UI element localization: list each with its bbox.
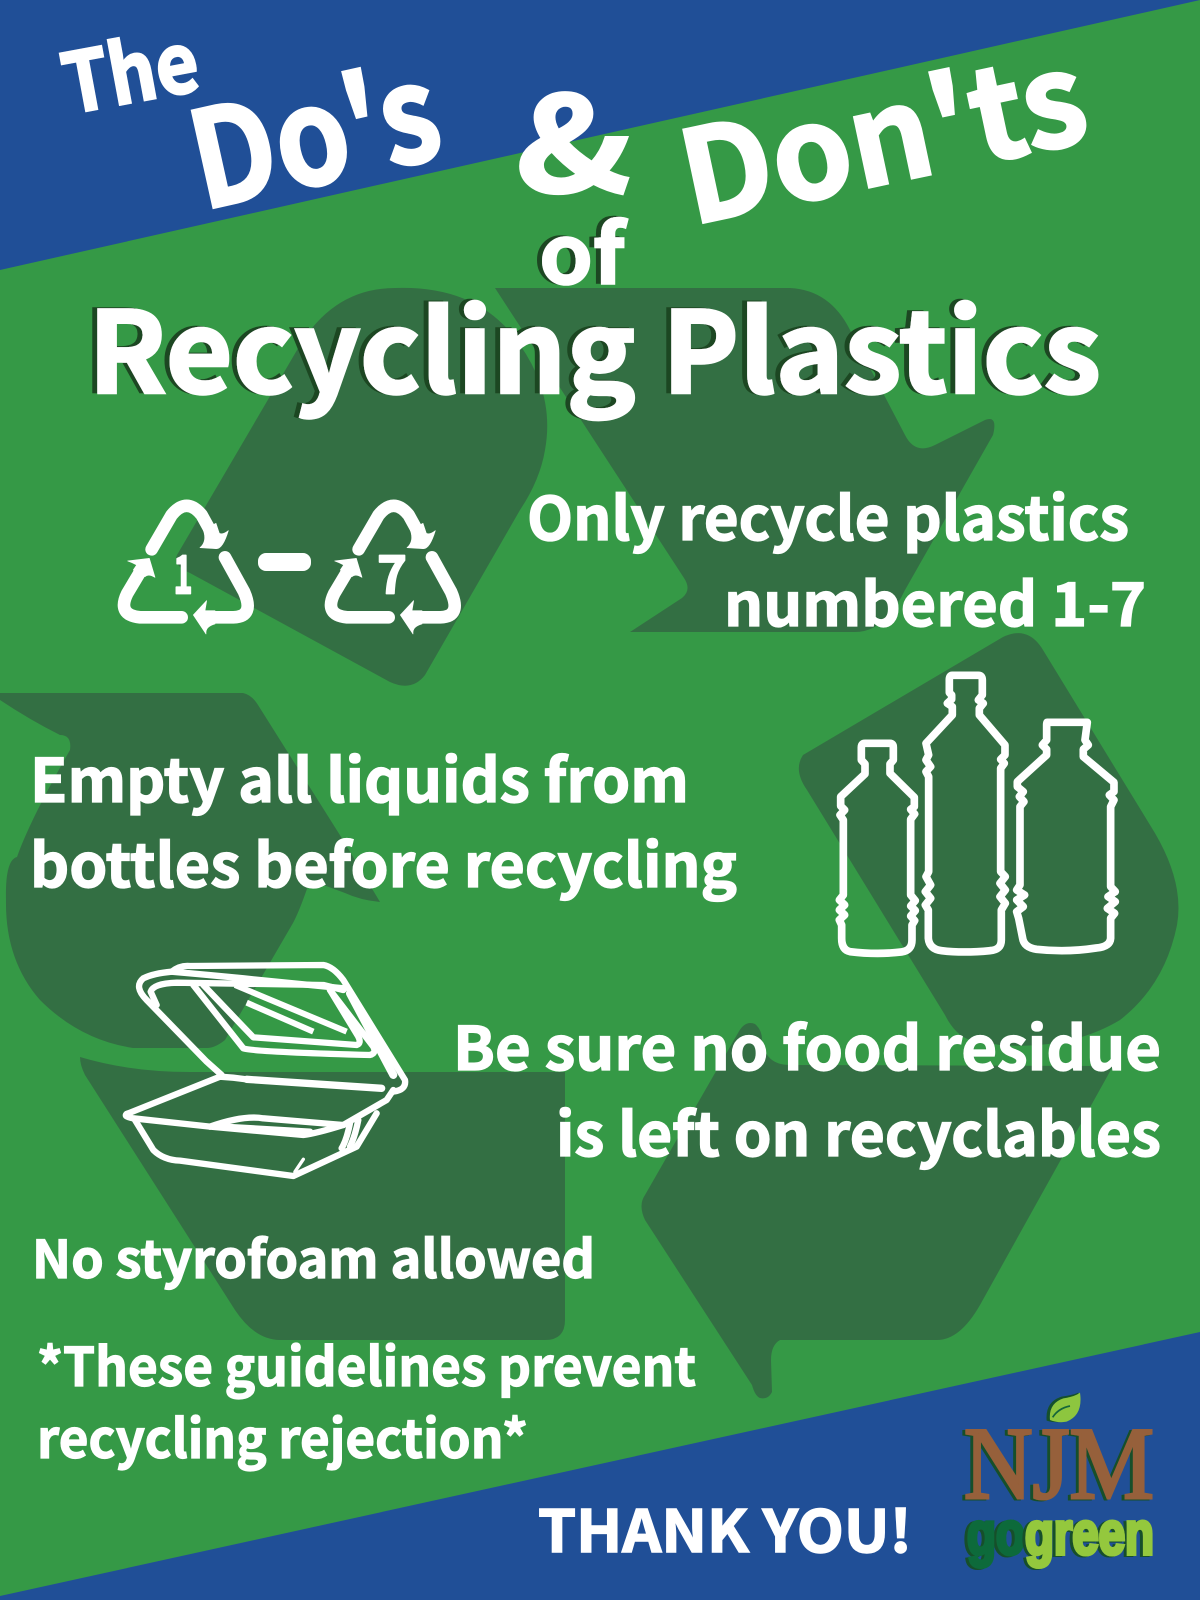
logo leaf <box>1047 1393 1081 1422</box>
rule 2 text <box>30 733 737 905</box>
icon: recycling code 7: 7 <box>377 533 407 609</box>
rule 1 text <box>527 471 1146 644</box>
thank you: THANK YOU! <box>538 1485 912 1569</box>
bottle tall <box>925 675 1005 952</box>
arrow: right <box>799 633 1178 1046</box>
arrow: upper left <box>176 288 547 686</box>
title: ampersand: & <box>516 40 631 231</box>
rule 3 text: Be sure no food residue <box>453 1001 1161 1088</box>
logo NJM wordmark: NJM <box>964 1407 1154 1521</box>
title: Recycling Plastics: Recycling Plastics <box>88 262 1101 426</box>
icon: recycling code 1 <box>124 506 248 634</box>
arrow: left <box>0 693 380 1048</box>
arrow: bottom left <box>80 1057 565 1340</box>
guideline note <box>37 1326 696 1474</box>
title: of: of <box>539 189 629 308</box>
rule 2 text: bottles before recycling <box>30 818 737 905</box>
bottom blue band <box>0 1332 1200 1600</box>
arrow: bottom right <box>642 1023 1113 1398</box>
bottle wide <box>1017 722 1115 951</box>
rule 3 text: is left on recyclables <box>556 1087 1161 1174</box>
rule 4 text: No styrofoam allowed <box>32 1218 595 1293</box>
logo: NJM go green <box>964 1393 1154 1567</box>
bottle small <box>839 743 915 953</box>
guideline note: recycling rejection* <box>37 1398 528 1474</box>
lid <box>139 965 405 1092</box>
logo go: go <box>967 1500 1025 1567</box>
top blue band <box>0 0 1200 270</box>
icon: styrofoam clamshell container <box>126 965 405 1176</box>
recycling symbol background <box>0 288 1178 1398</box>
guideline note: *These guidelines prevent <box>37 1326 696 1402</box>
title: Do's: Do's <box>169 5 456 248</box>
base <box>126 1077 393 1176</box>
rule 1 text: Only recycle plastics <box>527 471 1129 558</box>
icon: recycling code 7 <box>331 506 455 634</box>
icon: recycling code 1: 1 <box>173 533 193 609</box>
arrow: upper right <box>495 288 994 632</box>
title: Don'ts: Don'ts <box>661 0 1101 261</box>
rule 1 text: numbered 1-7 <box>724 557 1146 644</box>
icon: three plastic bottles <box>839 675 1115 953</box>
icon: dash <box>258 553 311 571</box>
logo green: green <box>1025 1500 1154 1567</box>
rule 2 text: Empty all liquids from <box>30 733 689 820</box>
rule 3 text <box>453 1001 1161 1174</box>
